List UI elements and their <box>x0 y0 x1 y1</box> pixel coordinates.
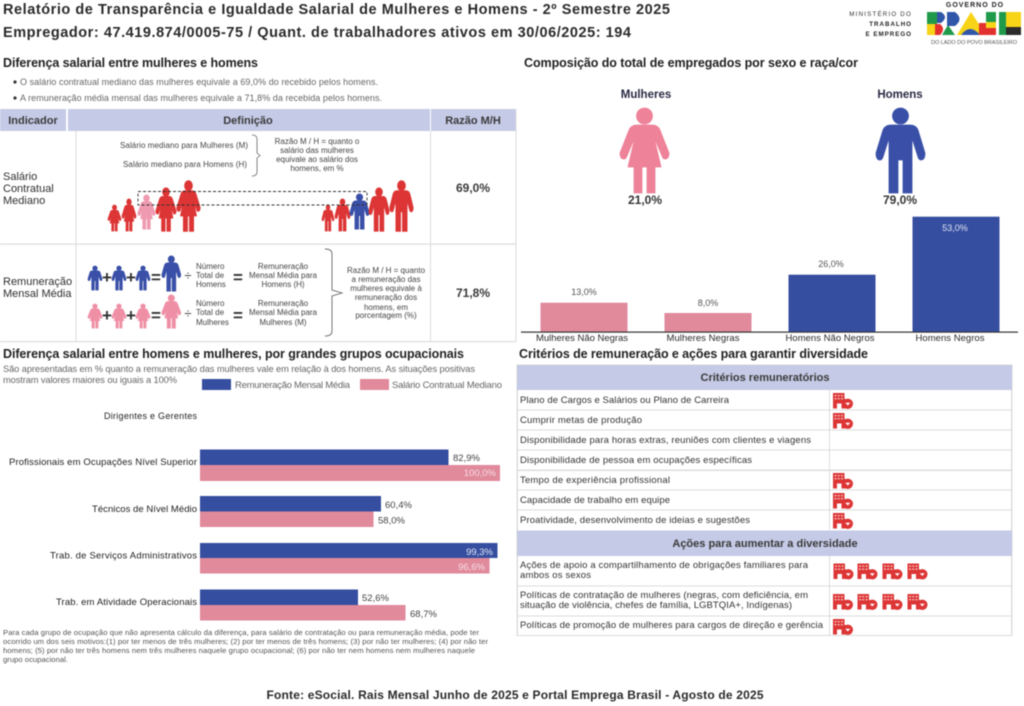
heading: criteria: Critérios de remuneração e ações para garantir diversidade <box>519 347 868 361</box>
definition: men average: Número <box>196 262 225 271</box>
row label: contractual salary: Contratual <box>3 183 54 195</box>
criteria list: Tempo de experiência profissional <box>520 475 670 486</box>
row label: contractual salary: Mediano <box>3 195 45 207</box>
bar chart: occupational groups: Trab. em Atividade Operacionais <box>56 597 197 608</box>
definition: median salary: salário das mulheres <box>280 146 354 155</box>
actions list: Ações de apoio a compartilhamento de obrigações familiares para <box>520 560 809 571</box>
panel: indicator table <box>0 109 516 342</box>
row label: contractual salary <box>3 171 54 207</box>
bar chart: sex and race: 53,0% <box>942 223 968 233</box>
text block: footnote: ocorrido um dos seis motivos:(1) por ter menos de três mulheres; (2) por ter menos de três homens; (3) por não ter mulheres; (4) por não ter <box>3 637 488 646</box>
title: Relatório de Transparência e Igualdade Salarial de Mulheres e Homens - 2º Semestre 2025 <box>3 2 670 18</box>
definition: women average: Mulheres (M) <box>259 318 307 327</box>
icons: actions adopted <box>833 564 928 635</box>
bar chart: sex and race <box>521 217 1018 344</box>
heading: occupational groups: Diferença salarial entre homens e mulheres, por grandes grupos ocupacionais <box>3 347 464 361</box>
bar chart: sex and race: 8,0% <box>698 298 718 308</box>
text block: key findings: O salário contratual mediano das mulheres equivale a 69,0% do recebido pelos homens. <box>20 77 378 87</box>
row label: contractual salary: Salário <box>3 171 37 183</box>
definition: men average <box>88 256 318 291</box>
definition: ratio explanation <box>325 249 426 336</box>
bar chart: sex and race: Mulheres Negras <box>666 333 740 344</box>
definition: women average: Número <box>196 299 225 308</box>
logo: ministry: MINISTÉRIO DO <box>849 11 912 18</box>
definition: women average: Total de <box>196 308 225 317</box>
actions list: ambos os sexos <box>520 570 591 581</box>
icon: women share: 21,0% <box>628 193 662 207</box>
legend: Remuneração Mensal Média <box>235 380 351 391</box>
definition: women average: = <box>151 306 161 325</box>
actions list: situação de violência, chefes de família, LGBTQIA+, Indígenas) <box>520 600 792 611</box>
icon: women share: Mulheres <box>621 89 671 101</box>
definition: ratio explanation: Razão M / H = quanto <box>347 266 426 275</box>
section header: diversity actions <box>517 530 1012 556</box>
icon row: women and men by salary <box>108 181 413 231</box>
bar chart: sex and race: 13,0% <box>571 287 597 297</box>
logo: ministry: E EMPREGO <box>866 31 912 38</box>
bar chart: occupational groups: 82,9% <box>453 453 480 464</box>
definition: ratio explanation: mulheres equivale à <box>350 284 422 293</box>
criteria list: Capacidade de trabalho em equipe <box>520 495 670 506</box>
table header: Definição <box>223 115 273 127</box>
definition: median salary: Salário mediano para Homens (H) <box>123 160 247 169</box>
definition: women average: ÷ <box>184 306 192 321</box>
bar chart: occupational groups: Trab. de Serviços Administrativos <box>50 550 197 562</box>
actions list: Políticas de promoção de mulheres para cargos de direção e gerência <box>520 620 824 631</box>
definition: women average: = <box>233 306 243 325</box>
logo: government of Brazil <box>927 2 1021 46</box>
definition: median salary: Salário mediano para Mulheres (M) <box>120 141 248 150</box>
icon: men share: Homens <box>877 89 923 101</box>
text block: chart explanation <box>3 364 475 385</box>
actions list <box>520 560 824 631</box>
definition: ratio explanation: remuneração dos <box>355 293 417 302</box>
panel: criteria table <box>516 364 1012 636</box>
definition: median salary: homens, em % <box>290 164 344 173</box>
section header: diversity actions: Ações para aumentar a diversidade <box>672 538 858 550</box>
bar chart: occupational groups: 60,4% <box>385 500 412 511</box>
bar chart: occupational groups: 96,6% <box>458 562 486 573</box>
text block: footnote: Para cada grupo de ocupação que não apresenta cálculo da diferença, para salário de contratação ou para remuneração média, pode ter <box>3 628 479 637</box>
text block: footnote: homens; (5) por não ter três homens nem três mulheres naquele grupo ocupacional; (6) por não ter nem homens nem mulheres naquele <box>3 646 475 655</box>
bar chart: occupational groups: Profissionais em Ocupações Nível Superior <box>9 457 197 468</box>
row label: average pay: Mensal Média <box>3 288 72 300</box>
bar chart: occupational groups: Dirigentes e Gerentes <box>104 411 198 421</box>
table header: Indicador <box>8 115 58 127</box>
definition: median salary <box>120 135 360 176</box>
section header: remuneration criteria <box>517 365 1012 390</box>
definition: women average <box>88 295 318 328</box>
bar chart: sex and race: Mulheres Não Negras <box>536 333 628 344</box>
criteria list: Cumprir metas de produção <box>520 415 642 426</box>
row label: average pay: Remuneração <box>3 276 72 288</box>
legend <box>202 379 502 391</box>
bar chart: sex and race: 26,0% <box>818 259 844 269</box>
bar chart: occupational groups: Técnicos de Nível Médio <box>92 504 197 515</box>
icon: men share: 79,0% <box>883 193 917 207</box>
icons: criteria adopted <box>833 393 853 529</box>
definition: men average: + <box>102 268 112 287</box>
bar chart: sex and race: Homens Não Negros <box>786 333 875 344</box>
legend: Salário Contratual Mediano <box>392 380 502 391</box>
bar chart: occupational groups: 99,3% <box>466 547 494 558</box>
definition: women average: Mulheres <box>196 318 229 327</box>
text block: footnote: grupo ocupacional. <box>3 655 68 664</box>
definition: ratio explanation: a remuneração das <box>352 275 420 284</box>
logo: ministry <box>849 11 912 38</box>
table header <box>0 109 516 131</box>
icon: women share <box>620 89 671 207</box>
definition: men average: Remuneração <box>258 262 309 271</box>
bar chart: occupational groups: 68,7% <box>410 609 437 620</box>
definition: ratio explanation: homens, em <box>364 303 408 312</box>
bar chart: sex and race: Homens Negros <box>916 333 985 344</box>
definition: women average: + <box>102 306 112 325</box>
definition: men average: + <box>126 268 136 287</box>
definition: women average: Mensal Média para <box>249 308 318 317</box>
definition: median salary: Razão M / H = quanto o <box>275 137 360 146</box>
text block: chart explanation: São apresentadas em % quanto a remuneração das mulheres vale em relação à dos homens. As situações positivas <box>3 364 475 374</box>
definition: men average: = <box>151 268 161 287</box>
value: average ratio: 71,8% <box>456 286 490 300</box>
definition: men average: Homens <box>196 280 226 289</box>
bar chart: occupational groups: 100,0% <box>464 468 497 479</box>
actions list: Políticas de contratação de mulheres (negras, com deficiência, em <box>520 590 808 601</box>
criteria list: Disponibilidade de pessoa em ocupações específicas <box>520 455 752 466</box>
source: Fonte: eSocial. Rais Mensal Junho de 2025 e Portal Emprega Brasil - Agosto de 2025 <box>266 688 764 702</box>
definition: ratio explanation: porcentagem (%) <box>355 311 417 320</box>
definition: women average: + <box>126 306 136 325</box>
definition: women average: Remuneração <box>258 299 309 308</box>
logo: government of Brazil: DO LADO DO POVO BRASILEIRO <box>931 40 1018 46</box>
logo: ministry: TRABALHO <box>869 21 912 28</box>
text block: footnote <box>3 628 488 664</box>
section header: remuneration criteria: Critérios remuneratórios <box>701 372 829 384</box>
title: Empregador: 47.419.874/0005-75 / Quant. de trabalhadores ativos em 30/06/2025: 194 <box>3 25 631 41</box>
bar chart: occupational groups: 58,0% <box>378 516 405 526</box>
value: contractual ratio: 69,0% <box>456 181 490 195</box>
icon: men share <box>876 89 925 207</box>
bar chart: occupational groups: 52,6% <box>362 593 389 604</box>
logo: government of Brazil: GOVERNO DO <box>946 2 1004 9</box>
heading: composition: Composição do total de empregados por sexo e raça/cor <box>524 56 858 70</box>
definition: men average: = <box>233 268 243 287</box>
definition: men average: Homens (H) <box>261 280 305 289</box>
text block: key findings: A remuneração média mensal das mulheres equivale a 71,8% da recebida pelos homens. <box>20 93 382 103</box>
criteria list: Disponibilidade para horas extras, reuniões com clientes e viagens <box>520 435 811 446</box>
table header: Razão M/H <box>445 115 501 127</box>
criteria list: Proatividade, desenvolvimento de ideias e sugestões <box>520 515 750 526</box>
definition: median salary: equivale ao salário dos <box>276 155 358 164</box>
text block: key findings <box>13 77 382 103</box>
bar chart: occupational groups <box>9 411 500 620</box>
row label: average pay <box>3 276 72 300</box>
text block: chart explanation: mostram valores maiores ou iguais a 100% <box>3 375 177 385</box>
definition: men average: ÷ <box>184 268 192 283</box>
definition: men average: Mensal Média para <box>249 271 318 280</box>
heading: salary difference: Diferença salarial entre mulheres e homens <box>3 56 258 70</box>
criteria list <box>520 395 811 526</box>
criteria list: Plano de Cargos e Salários ou Plano de Carreira <box>520 395 730 406</box>
title <box>3 2 670 41</box>
definition: men average: Total de <box>196 271 225 280</box>
